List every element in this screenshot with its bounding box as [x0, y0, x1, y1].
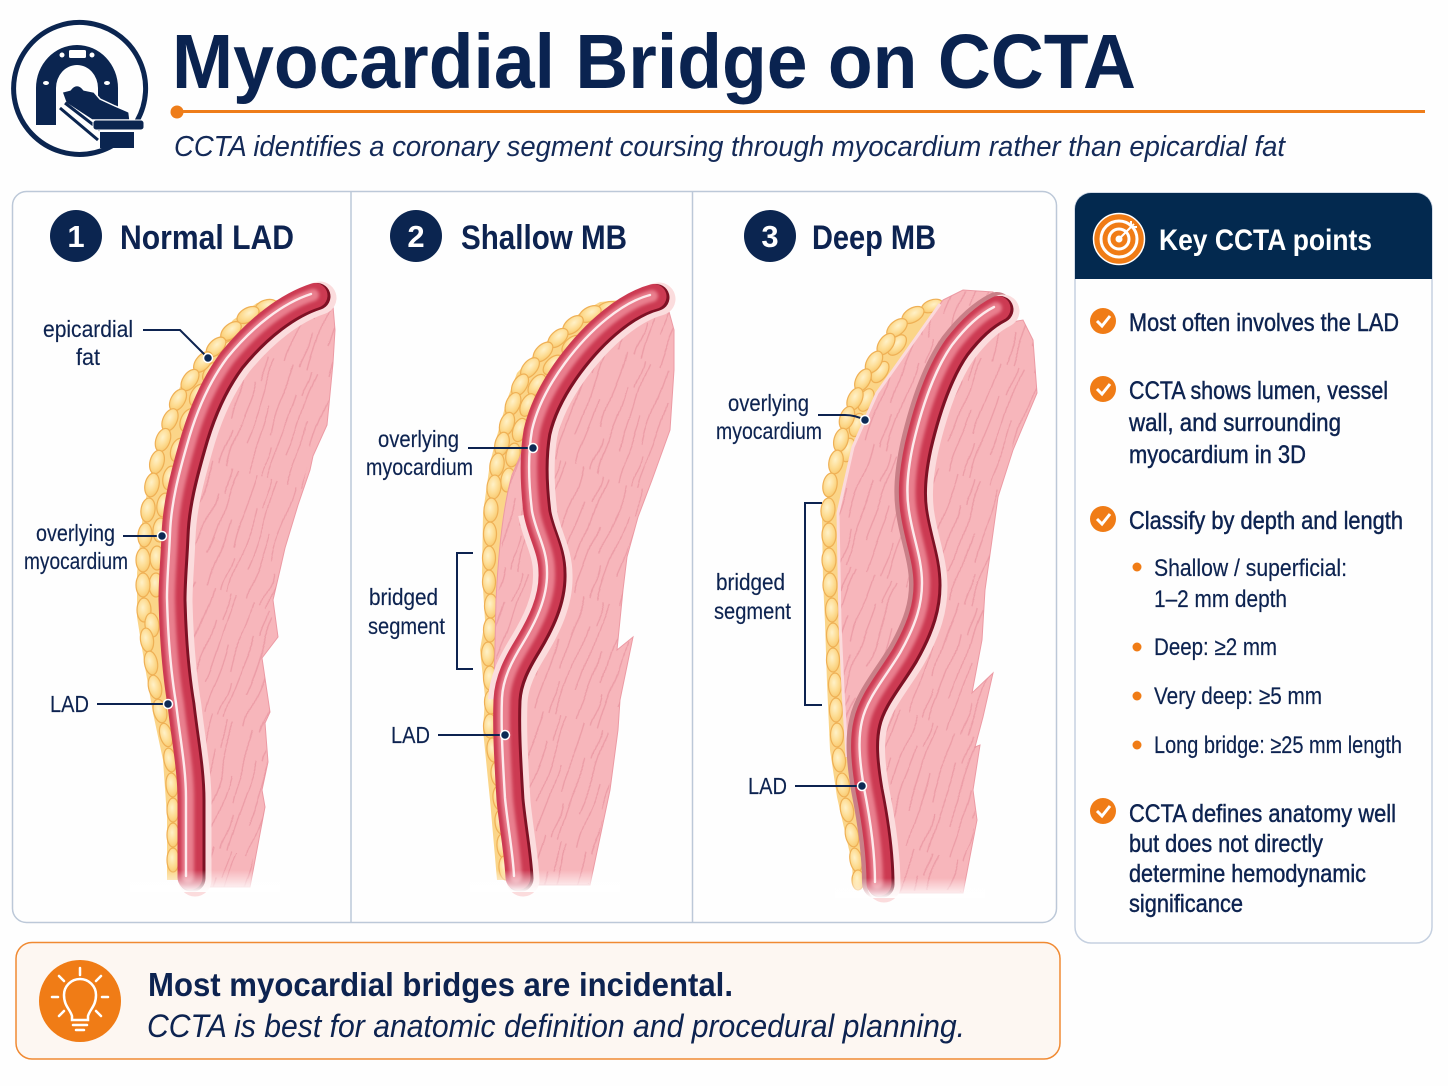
point: 3D: CCTA shows lumen, vessel [1129, 377, 1388, 405]
point: 3D: wall, and surrounding [1128, 409, 1341, 437]
point: anatomy vs hemodynamics: but does not directly [1129, 830, 1323, 858]
callout: incidental: Most myocardial bridges are incidental. [148, 966, 733, 1003]
label: overlying myocardium: overlying [378, 426, 459, 452]
heading: shallow MB [390, 210, 627, 262]
point: 3D: myocardium in 3D [1129, 441, 1306, 469]
icon: CT scanner [14, 22, 146, 154]
label: bridged segment: segment [368, 613, 446, 639]
panel: deep MB [714, 210, 1037, 898]
heading: shallow MB: Shallow MB [461, 219, 627, 257]
label: bridged segment [714, 503, 822, 705]
title rule [170, 106, 1425, 118]
point: anatomy vs hemodynamics: determine hemodynamic [1129, 860, 1366, 888]
heading: deep MB: Deep MB [812, 219, 936, 257]
label: overlying myocardium [366, 426, 538, 480]
heading: normal LAD: 1 [67, 219, 85, 254]
label: LAD [50, 691, 172, 717]
label: epicardial fat [43, 316, 212, 370]
panel: anatomy comparison [12, 192, 1056, 922]
callout: incidental [16, 942, 1060, 1059]
point: anatomy vs hemodynamics [1090, 798, 1396, 918]
label: overlying myocardium: myocardium [716, 418, 822, 444]
label: overlying myocardium: myocardium [24, 548, 128, 574]
heading: normal LAD [50, 210, 294, 262]
panel header [1075, 193, 1432, 279]
title: Myocardial Bridge on CCTA [172, 19, 1136, 105]
bullet: shallow [1132, 555, 1347, 613]
label: bridged segment: bridged [369, 584, 438, 610]
bullet: shallow: Shallow / superficial: [1154, 555, 1347, 582]
illustration: deep MB [820, 290, 1037, 898]
heading: deep MB: 3 [761, 219, 779, 254]
label: LAD [391, 722, 510, 748]
heading: deep MB [744, 210, 936, 262]
label: bridged segment: bridged [716, 569, 785, 595]
label: LAD: LAD [748, 773, 787, 799]
icon: light bulb [39, 960, 121, 1042]
panel: shallow MB [366, 210, 674, 892]
point: anatomy vs hemodynamics: CCTA defines anatomy well [1129, 800, 1396, 828]
label: overlying myocardium: overlying [728, 390, 809, 416]
label: bridged segment: segment [714, 598, 792, 624]
label: LAD: LAD [50, 691, 89, 717]
label: LAD: LAD [391, 722, 430, 748]
label: bridged segment [368, 553, 473, 669]
subtitle: CCTA identifies a coronary segment coursing through myocardium rather than epicardial fat [174, 131, 1287, 163]
label: overlying myocardium: overlying [36, 520, 115, 546]
illustration: shallow MB [470, 295, 674, 892]
point: 3D [1090, 376, 1388, 469]
label: overlying myocardium [24, 520, 166, 574]
bullet: deep: Deep: ≥2 mm [1154, 634, 1277, 661]
label: epicardial fat: epicardial [43, 316, 133, 342]
label: overlying myocardium: myocardium [366, 454, 473, 480]
point: anatomy vs hemodynamics: significance [1129, 890, 1243, 918]
heading: shallow MB: 2 [407, 219, 425, 254]
label: LAD [748, 773, 866, 799]
bullet: long bridge: Long bridge: ≥25 mm length [1154, 732, 1402, 759]
heading: normal LAD: Normal LAD [120, 219, 294, 257]
illustration: normal LAD [130, 294, 335, 892]
point: classify: Classify by depth and length [1129, 507, 1403, 535]
icon: target [1094, 214, 1144, 264]
bullet: shallow: 1–2 mm depth [1154, 586, 1287, 613]
panel header: Key CCTA points [1159, 224, 1372, 257]
panel: key CCTA points [1075, 193, 1432, 943]
bullet: very deep: Very deep: ≥5 mm [1154, 683, 1322, 710]
callout: incidental: CCTA is best for anatomic definition and procedural planning. [147, 1008, 965, 1044]
point: classify [1090, 506, 1403, 759]
label: overlying myocardium [716, 390, 870, 444]
label: epicardial fat: fat [76, 344, 101, 370]
panel: normal LAD [24, 210, 335, 892]
point: LAD: Most often involves the LAD [1129, 309, 1399, 337]
